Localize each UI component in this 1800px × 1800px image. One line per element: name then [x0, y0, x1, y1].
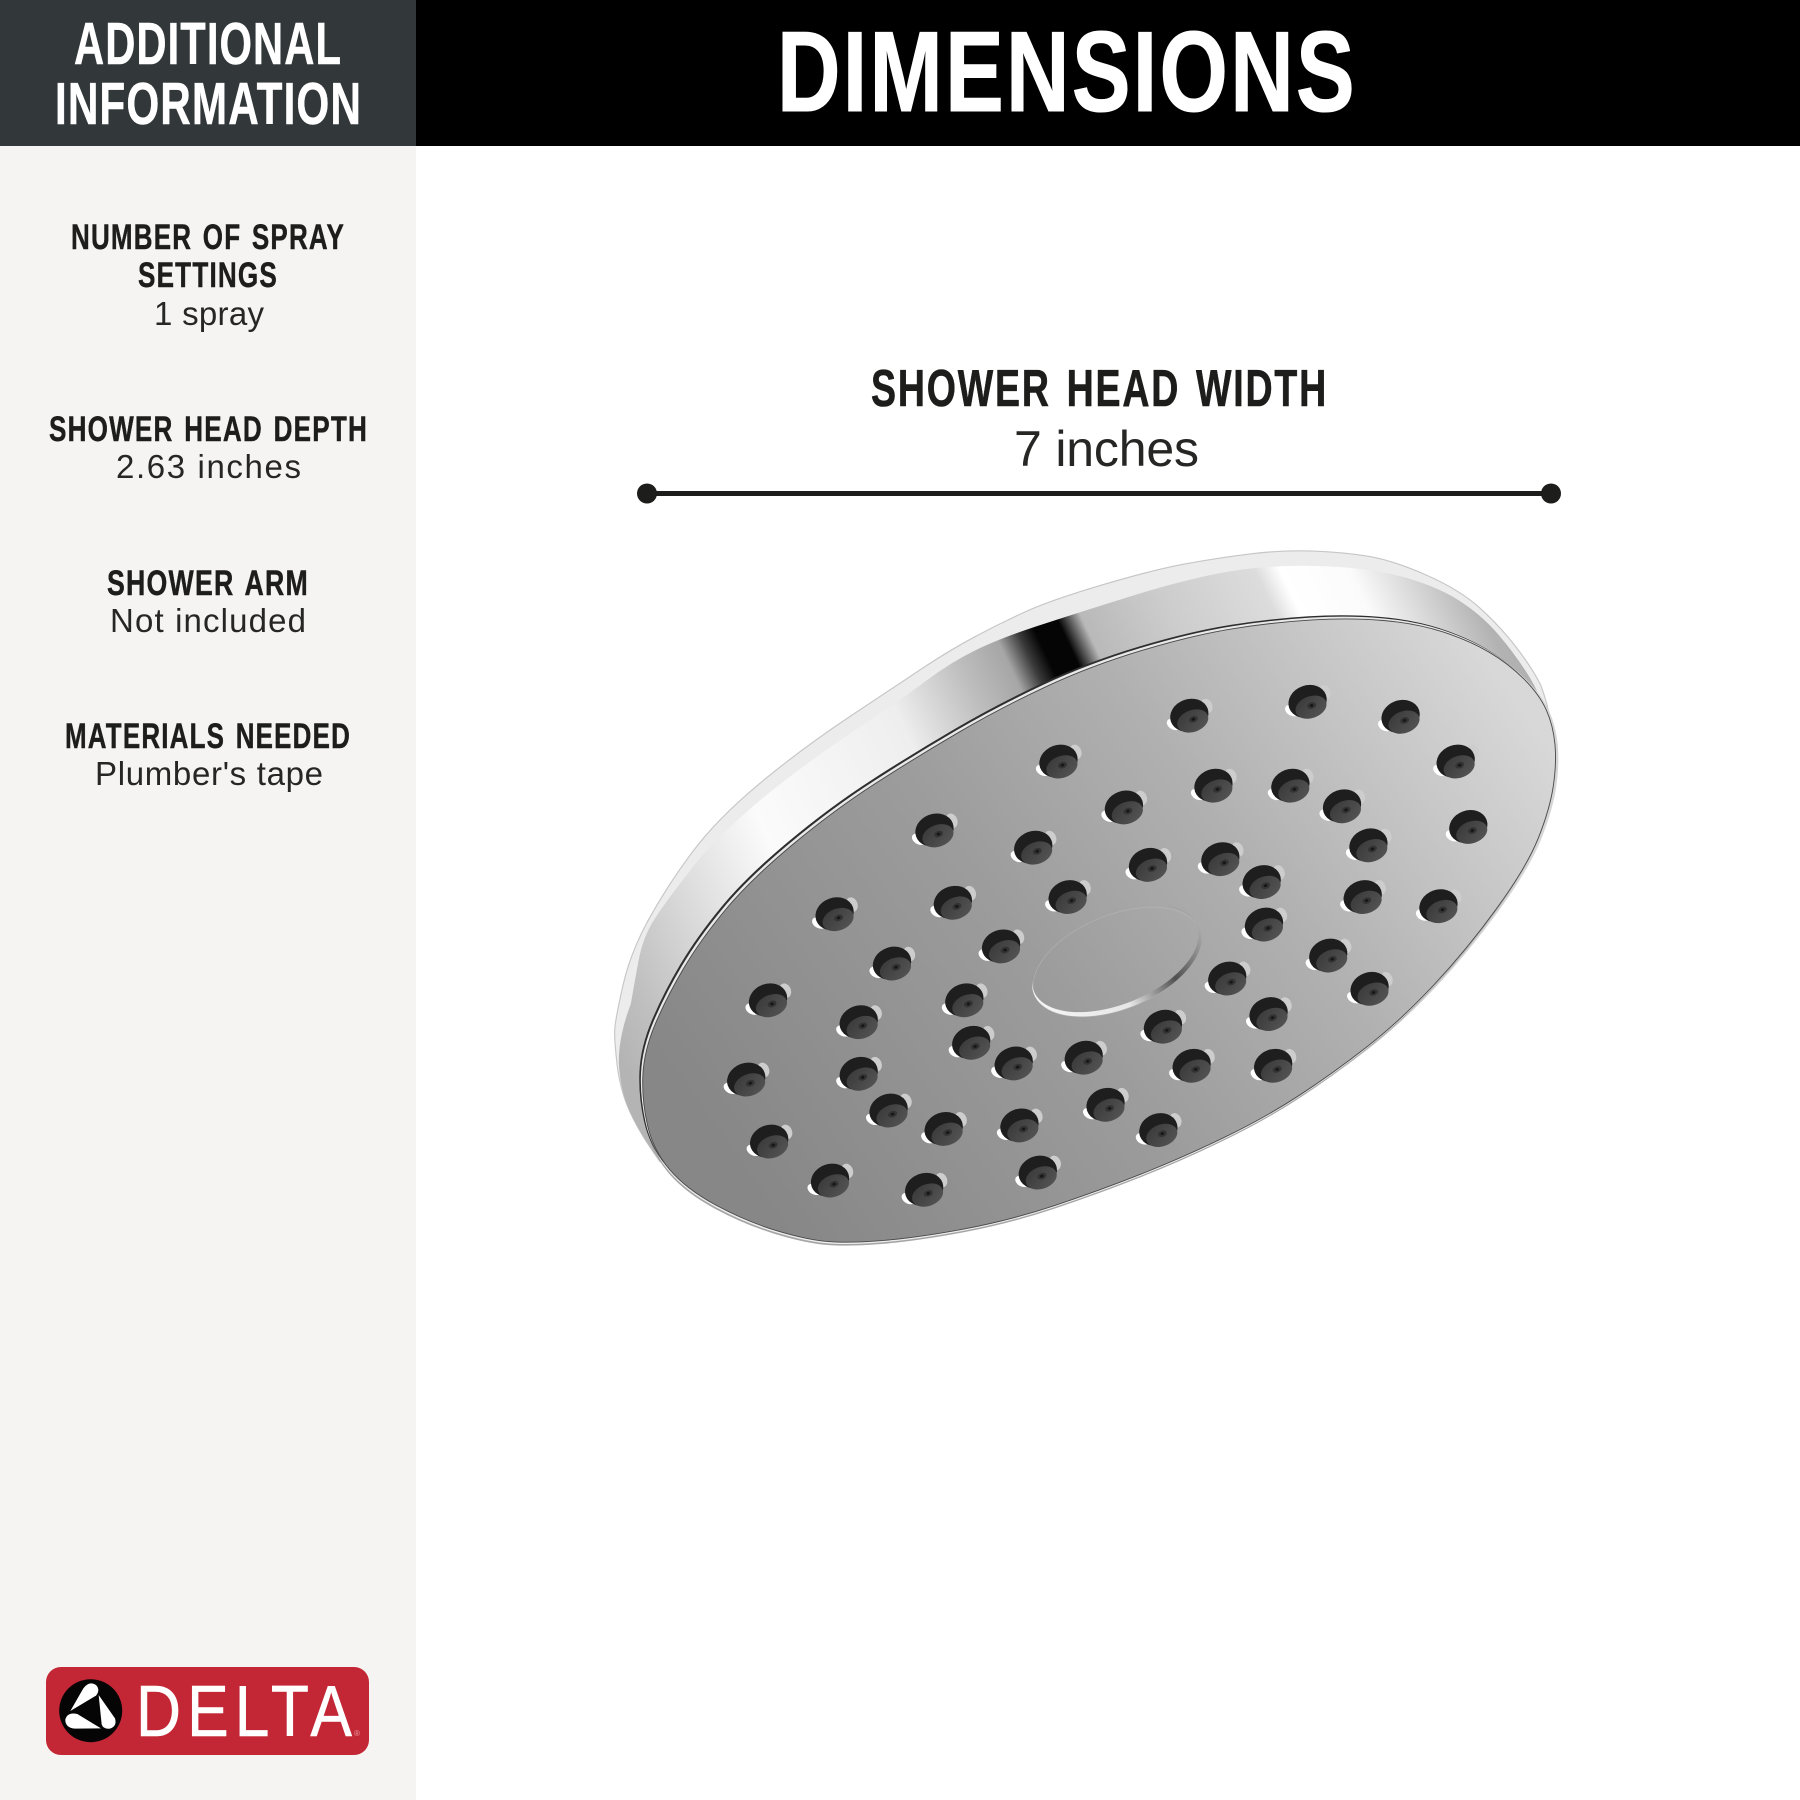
spec: number of spray settings	[71, 218, 345, 332]
spec: number of spray settings: NUMBER OF SPRAY	[71, 218, 345, 257]
spec: number of spray settings: SETTINGS	[138, 256, 278, 295]
spec: shower arm: SHOWER ARM	[107, 564, 309, 603]
spec: shower head depth: SHOWER HEAD DEPTH	[49, 410, 368, 449]
heading: additional information: ADDITIONAL	[74, 11, 342, 77]
logo: delta	[46, 1667, 369, 1755]
width label	[871, 360, 1328, 477]
logo: delta: ®	[354, 1729, 360, 1738]
logo: delta: DELTA	[136, 1672, 358, 1752]
title bar: dimensions	[416, 0, 1800, 146]
spec: materials needed	[65, 717, 351, 792]
spec: shower arm	[107, 564, 309, 639]
shower head illustration	[615, 551, 1558, 1246]
width label: SHOWER HEAD WIDTH	[871, 360, 1328, 418]
spec: shower head depth: 2.63 inches	[116, 448, 301, 485]
heading: additional information: INFORMATION	[55, 71, 362, 137]
width dimension line	[637, 484, 1561, 504]
panel: additional information sidebar	[0, 0, 416, 1800]
spec: number of spray settings: 1 spray	[154, 295, 264, 332]
spec: shower head depth	[49, 410, 368, 485]
spec: materials needed: Plumber's tape	[95, 755, 323, 792]
spec: materials needed: MATERIALS NEEDED	[65, 717, 351, 756]
title bar: dimensions: DIMENSIONS	[777, 9, 1357, 136]
heading: additional information	[0, 0, 416, 146]
spray nozzles	[722, 680, 1493, 1211]
shower head rim	[615, 551, 1551, 1162]
width label: 7 inches	[1014, 421, 1199, 477]
center ring	[1017, 885, 1217, 1039]
spec: shower arm: Not included	[110, 602, 306, 639]
shower head face	[639, 615, 1558, 1246]
